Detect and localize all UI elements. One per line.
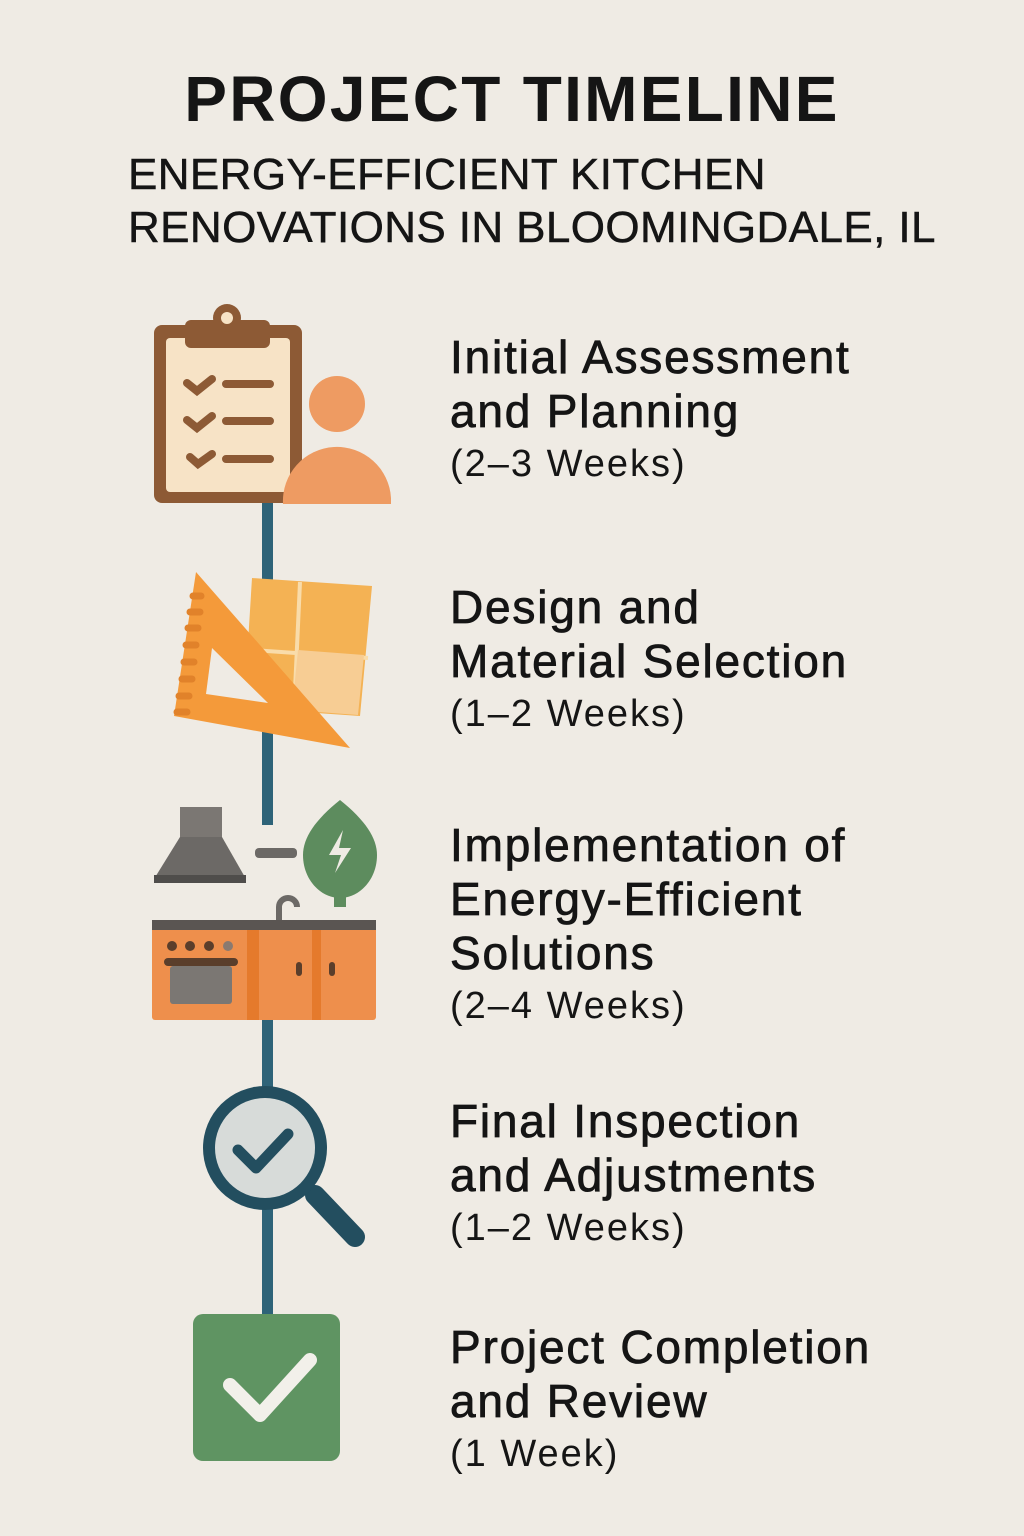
step 4 text: (1–2 Weeks)	[450, 1207, 687, 1249]
step 1 text: (2–3 Weeks)	[450, 443, 687, 485]
step 2 text: Material Selection	[450, 635, 848, 687]
step 4 text	[450, 1095, 817, 1249]
icon: completion check	[193, 1314, 340, 1461]
step 1 text: and Planning	[450, 385, 740, 437]
title: PROJECT TIMELINE	[184, 63, 840, 135]
step 3 text: Implementation of	[450, 819, 846, 871]
subtitle	[128, 150, 936, 252]
step 5 text: Project Completion	[450, 1321, 871, 1373]
icon: clipboard	[154, 304, 391, 504]
step 3 text: Energy-Efficient	[450, 873, 803, 925]
subtitle: ENERGY-EFFICIENT KITCHEN	[128, 150, 766, 199]
icon: triangle ruler and tiles	[174, 572, 372, 748]
step 2 text: (1–2 Weeks)	[450, 693, 687, 735]
step 1 text	[450, 331, 851, 485]
step 5 text: and Review	[450, 1375, 708, 1427]
icon: kitchen energy	[152, 800, 377, 1020]
step 3 text: Solutions	[450, 927, 655, 979]
step 3 text	[450, 819, 846, 1027]
step 2 text	[450, 581, 848, 735]
icon: magnifier check	[203, 1086, 355, 1237]
step 2 text: Design and	[450, 581, 701, 633]
step 4 text: and Adjustments	[450, 1149, 817, 1201]
step 5 text	[450, 1321, 871, 1475]
subtitle: RENOVATIONS IN BLOOMINGDALE, IL	[128, 203, 936, 252]
step 3 text: (2–4 Weeks)	[450, 985, 687, 1027]
step 4 text: Final Inspection	[450, 1095, 801, 1147]
step 1 text: Initial Assessment	[450, 331, 851, 383]
timeline line	[262, 500, 273, 1318]
step 5 text: (1 Week)	[450, 1433, 619, 1475]
